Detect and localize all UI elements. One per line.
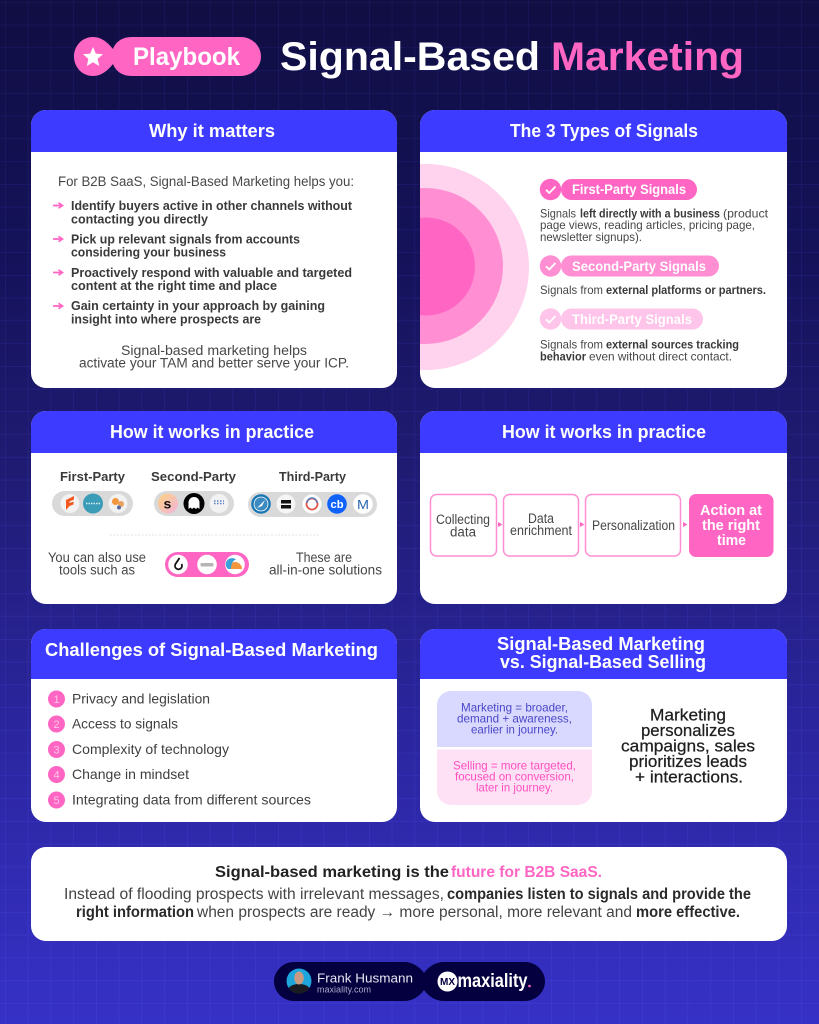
text: marketing personalizes: + interactions. [635,768,743,786]
text: first-party description: (product [723,206,769,220]
text: first-party description: Signals [540,206,576,220]
text: second-party description: external platforms or partners. [606,283,766,297]
panel: conclusion [31,847,787,941]
arrow [498,522,502,527]
text: third-party description: behavior [540,350,586,364]
text: first-party description [540,206,769,244]
heading: marketing vs selling: vs. Signal-Based Selling [500,651,706,672]
icon: portrait [286,968,312,994]
text: marketing personalizes: personalizes [641,721,735,740]
text: marketing personalizes: campaigns, sales [621,736,755,756]
logos: third-party tools: M [357,497,369,512]
box: marketing: Marketing = broader, [461,701,568,715]
step: personalization: Personalization [592,518,675,533]
title: Signal-Based [280,35,540,79]
text: conclusion body: Instead of flooding prospects with irrelevant messages, [64,886,444,903]
divider [110,534,320,536]
text: first-party description: left directly with a business [580,206,720,220]
step: action at the right time: the right [702,517,760,534]
column labels: First-Party [60,470,125,484]
logos: third-party tools [248,492,377,517]
step: collecting data: Collecting [436,512,490,527]
bullet list: Pick up relevant signals from accounts [71,232,300,246]
numbered list [48,690,311,808]
heading: why it matters: Why it matters [149,120,275,141]
panel: how it works in practice (tools) [31,411,397,604]
concentric signal rings [420,164,529,370]
text: third-party description [540,338,739,364]
panel: how it works in practice (process) [420,411,787,604]
step: collecting data: data [450,524,476,540]
header badge: Playbook [74,37,261,76]
box: selling: Selling = more targeted, [453,758,576,772]
logos: first-party tools [52,491,133,516]
text: conclusion body: companies listen to signals and provide the [447,886,751,903]
text: all-in-one solutions: These are [296,550,352,565]
box: selling: later in journey. [476,780,553,794]
text: author [317,970,413,994]
bullet list: contacting you directly [71,212,209,226]
text: intro: For B2B SaaS, Signal-Based Marketing helps you: [58,174,354,189]
header badge: Playbook: Playbook [133,43,240,71]
arrow [580,522,584,527]
text: you can also use: You can also use [48,550,146,565]
text: marketing personalizes [621,706,755,786]
text: first-party description: page views, reading articles, pricing page, [540,218,755,232]
numbered list: Access to signals [72,716,178,732]
box: marketing: demand + awareness, [457,712,572,726]
arrow [683,522,688,527]
panel: challenges [31,629,397,822]
logos: second-party tools [154,491,234,516]
text: marketing personalizes: Marketing [650,706,726,725]
text: all-in-one solutions [269,550,382,578]
text: conclusion body: when prospects are ready → more personal, more relevant and [196,904,632,921]
text: conclusion body [64,886,751,921]
step: action at the right time: Action at [700,502,762,519]
numbered list: 2 [54,719,60,731]
text: third-party description: even without direct contact. [589,350,732,364]
numbered list: 3 [54,744,60,756]
panel: why it matters [31,110,397,388]
step: action at the right time: time [717,532,746,549]
logos: second-party tools: s [164,496,172,512]
bullet list [53,198,353,326]
bullet list: content at the right time and place [71,278,277,293]
heading: marketing vs selling: Signal-Based Marketing [497,633,705,654]
icon: star [83,47,103,66]
text: you can also use [48,550,146,578]
box: marketing [437,691,592,747]
bullet list: Proactively respond with valuable and targeted [71,265,352,280]
heading: challenges: Challenges of Signal-Based Marketing [45,639,378,660]
text: second-party description [540,283,766,297]
step: data enrichment: enrichment [510,523,572,538]
numbered list: Privacy and legislation [72,690,210,706]
text: first-party description: newsletter signups). [540,230,642,244]
bullet list: Identify buyers active in other channels without [71,198,353,213]
step: personalization [586,494,680,556]
heading: the 3 types of signals: The 3 Types of Signals [510,120,698,141]
panel: the 3 types of signals [420,110,787,388]
text: marketing personalizes: prioritizes leads [629,752,747,771]
logos: all-in-one tools [165,552,249,577]
pill: third-party signals [540,308,703,330]
text: closing [79,343,349,370]
step: data enrichment [504,494,578,556]
logos: third-party tools: cb [330,499,344,511]
pill: second-party signals: Second-Party Signals [572,259,706,274]
numbered list: Change in mindset [72,766,189,782]
column labels: Second-Party [151,470,236,484]
text: you can also use: tools such as [59,562,135,578]
text: author: maxiality.com [317,984,371,994]
bullet list: Gain certainty in your approach by gaining [71,298,325,313]
text: conclusion body: right information [76,904,194,921]
heading: conclusion: future for B2B SaaS. [451,864,602,881]
logo: maxiality: maxiality [458,971,528,992]
numbered list: Integrating data from different sources [72,792,311,808]
box: marketing: earlier in journey. [471,723,558,737]
step: collecting data [430,494,496,556]
column labels: Third-Party [279,470,346,484]
bullet list: considering your business [71,245,226,260]
pill: first-party signals [540,179,697,200]
footer badge [274,962,545,1001]
text: third-party description: Signals from [540,338,603,352]
heading: conclusion: Signal-based marketing is the [215,864,449,881]
box: selling: focused on conversion, [455,770,574,784]
title [280,35,744,79]
box: selling [437,750,592,805]
title: Marketing [551,35,744,79]
heading: how it works in practice: How it works in practice [110,421,314,442]
text: conclusion body: more effective. [636,904,740,921]
step: action at the right time [689,494,774,557]
text: second-party description: Signals from [540,283,603,297]
numbered list: Complexity of technology [72,741,229,757]
logo: maxiality: MX [440,977,455,988]
column labels [60,470,346,484]
pill: first-party signals: First-Party Signals [572,182,686,197]
text: closing: activate your TAM and better serve your ICP. [79,356,349,370]
bullet list: insight into where prospects are [71,312,261,326]
heading: how it works in practice: How it works in practice [502,421,706,442]
step: data enrichment: Data [528,511,554,526]
panel: marketing vs selling [420,629,787,822]
pill: second-party signals [540,255,719,277]
pill: third-party signals: Third-Party Signals [572,312,692,327]
heading: marketing vs selling [497,633,706,672]
text: all-in-one solutions: all-in-one solutions [269,562,382,578]
numbered list: 1 [54,694,60,706]
heading: conclusion [215,864,602,881]
text: closing: Signal-based marketing helps [121,343,307,358]
text: third-party description: external sources tracking [606,338,739,352]
text: author: Frank Husmann [317,970,413,986]
numbered list: 5 [54,795,60,807]
numbered list: 4 [54,770,60,782]
